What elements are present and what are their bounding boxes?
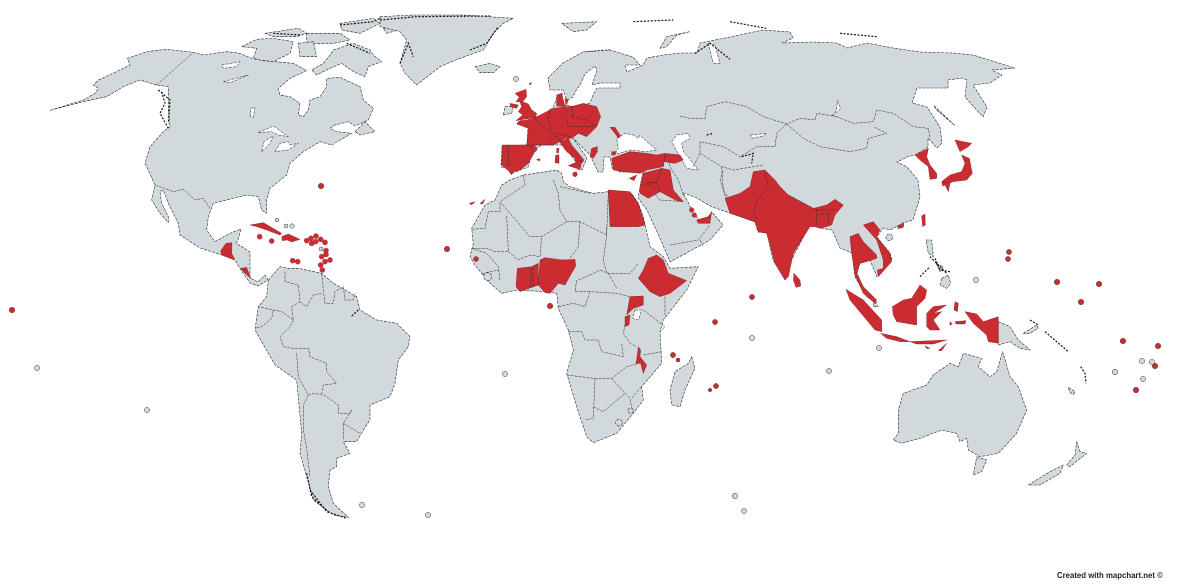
landmass: south america (255, 267, 410, 518)
highlighted countries: africa and gulf (469, 190, 712, 373)
rwanda and burundi (625, 315, 630, 327)
inland seas (613, 133, 698, 170)
costa rica (241, 267, 251, 278)
japan (955, 140, 972, 152)
guatemala, belize, el salvador (221, 243, 235, 260)
mediterranean islands (557, 148, 559, 153)
sulawesi (927, 305, 947, 330)
west sahara red specks (469, 202, 475, 205)
country borders: iran and arabia (650, 160, 727, 247)
landmass: north america (50, 17, 400, 286)
credit line: Created with mapchart.net © (1057, 571, 1163, 580)
caribbean island markers (257, 233, 333, 273)
sri lanka (793, 273, 801, 287)
country borders: europe (548, 108, 552, 130)
albania and kosovo (590, 147, 597, 158)
lakes and arctic gulfs (680, 22, 955, 198)
taiwan (922, 214, 925, 227)
iberia (502, 145, 537, 175)
country borders: africa (472, 175, 665, 426)
country borders: central and east asia (680, 22, 930, 198)
great britain (502, 83, 621, 177)
landmass: africa and madagascar (470, 170, 698, 443)
western new guinea (965, 312, 998, 343)
hong kong (897, 223, 904, 229)
canadian arctic islands (158, 17, 400, 135)
nigeria (538, 258, 576, 293)
uae, qatar and bahrain (697, 212, 712, 223)
country borders: north america (157, 52, 193, 85)
landmass: australia, new zealand, papua new guinea (893, 320, 1087, 485)
hispaniola (282, 234, 300, 242)
uganda (627, 296, 643, 315)
landmass: greenland, iceland, svalbard (380, 15, 690, 153)
thailand and malay peninsula (850, 233, 877, 303)
highlighted countries: asia (725, 140, 998, 351)
denmark (557, 93, 565, 107)
korea (915, 148, 937, 179)
ghana, togo and benin (516, 263, 538, 292)
malawi (636, 347, 647, 373)
borneo (892, 285, 927, 325)
turkey, levant and iraq (612, 152, 683, 202)
highlighted countries: europe and middle east (502, 83, 683, 202)
lake victoria (633, 310, 642, 320)
sumatra (846, 289, 882, 332)
small island markers: red (9, 183, 1161, 393)
country borders: south america (255, 272, 360, 518)
vietnam (863, 222, 892, 277)
egypt (608, 190, 645, 227)
western and central europe (517, 103, 601, 147)
moluccas (954, 302, 958, 312)
highlighted countries: central america and caribbean (221, 223, 333, 278)
small island markers: grey (34, 76, 1155, 518)
pakistan, india, nepal, bhutan, bangladesh (725, 170, 843, 280)
landmass: southeast asian islands (873, 234, 951, 307)
moldova (610, 127, 621, 138)
italy (560, 138, 584, 167)
great lakes and inland water (222, 62, 298, 152)
landmass: eurasia (501, 22, 1015, 303)
ethiopia (638, 255, 687, 297)
java and lesser sunda islands (881, 333, 910, 342)
cuba (250, 223, 282, 235)
